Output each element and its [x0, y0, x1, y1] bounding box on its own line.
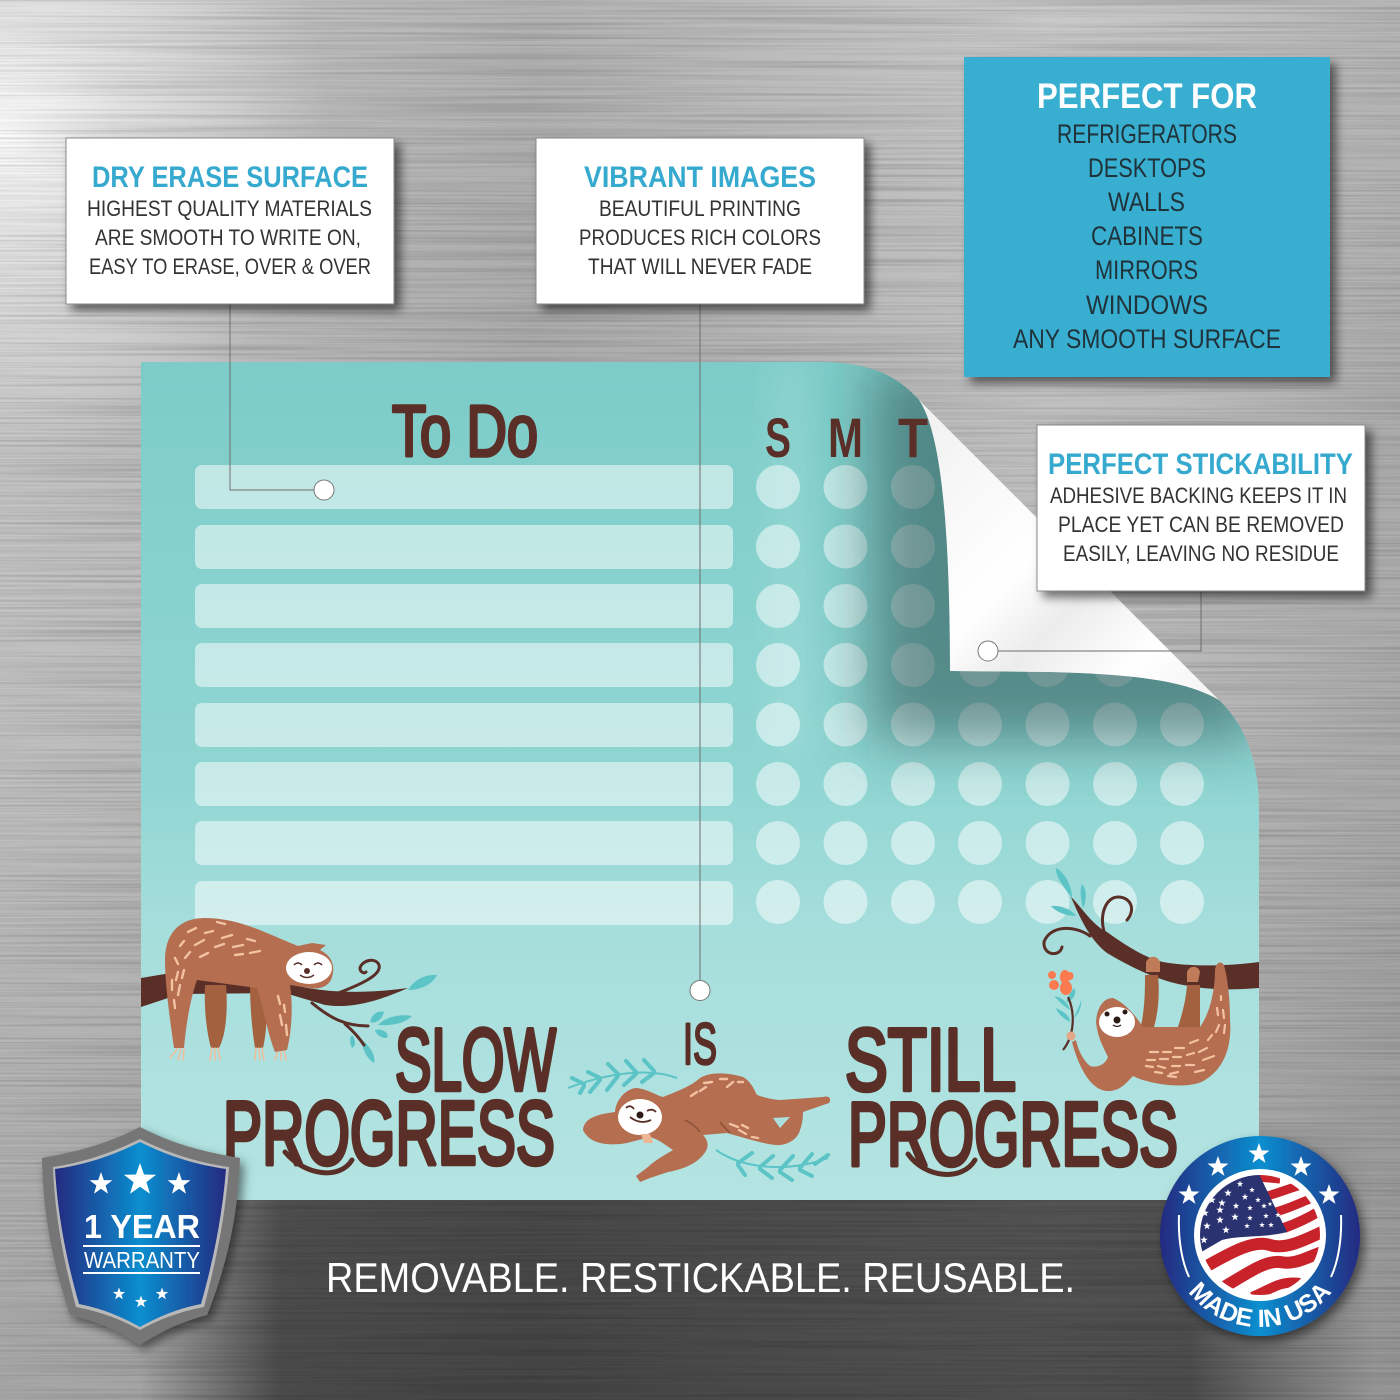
callout: vibrant images: THAT WILL NEVER FADE — [588, 254, 812, 279]
callout: vibrant images: BEAUTIFUL PRINTING — [599, 196, 801, 221]
day letters S M T: M — [828, 406, 863, 469]
callout: vibrant images: PRODUCES RICH COLORS — [579, 225, 821, 250]
callout: dry erase surface: DRY ERASE SURFACE — [92, 161, 368, 194]
panel: perfect for: WALLS — [1108, 187, 1185, 217]
panel: perfect for: ANY SMOOTH SURFACE — [1013, 324, 1281, 354]
badge: 1 year warranty shield: WARRANTY — [84, 1247, 200, 1273]
to-do writing rows — [195, 465, 733, 925]
day letters S M T: S — [765, 406, 791, 469]
slogan: Slow progress is still progress: SLOW — [395, 1010, 556, 1109]
day letters S M T: T — [898, 406, 928, 469]
badge: made in USA: MADE IN USA — [1189, 1281, 1332, 1327]
slogan: Slow progress is still progress: STILL — [845, 1010, 1016, 1109]
callout lines and markers — [230, 304, 1201, 1000]
callout: perfect stickability: PERFECT STICKABILITY — [1048, 448, 1353, 481]
panel: perfect for: CABINETS — [1091, 221, 1203, 251]
sloth hanging on branch, left — [141, 918, 437, 1063]
panel: perfect for: WINDOWS — [1086, 290, 1208, 320]
sloth hanging with flower, right — [1044, 868, 1259, 1091]
tagline: REMOVABLE. RESTICKABLE. REUSABLE. — [326, 1254, 1075, 1301]
panel: perfect for: DESKTOPS — [1088, 153, 1206, 183]
badge: 1 year warranty shield — [42, 1127, 240, 1345]
badge: 1 year warranty shield: 1 YEAR — [84, 1208, 200, 1245]
callout: vibrant images — [536, 138, 864, 304]
sloth lying down with leaves, centre — [568, 1060, 830, 1182]
slogan: Slow progress is still progress: PROGRESS — [223, 1084, 555, 1184]
callout: perfect stickability: PLACE YET CAN BE REMOVED — [1058, 512, 1344, 537]
flag inside badge — [1200, 1175, 1320, 1295]
slogan: Slow progress is still progress: PROGRESS — [848, 1085, 1178, 1185]
callout: dry erase surface: EASY TO ERASE, OVER & OVER — [89, 254, 371, 279]
panel: perfect for — [964, 57, 1330, 377]
slogan: Slow progress is still progress: IS — [683, 1012, 717, 1077]
day tracking circles — [756, 465, 1204, 924]
callout: perfect stickability: ADHESIVE BACKING KEEPS IT IN — [1050, 483, 1347, 508]
panel: perfect for: PERFECT FOR — [1037, 77, 1257, 116]
peeled white corner flap — [919, 400, 1219, 700]
callout: dry erase surface: ARE SMOOTH TO WRITE ON, — [95, 225, 361, 250]
panel: perfect for: REFRIGERATORS — [1057, 119, 1237, 149]
heading: To Do: To Do — [392, 392, 538, 472]
curl shadow on sheet — [770, 362, 1259, 752]
panel: perfect for: MIRRORS — [1095, 255, 1198, 285]
callout: dry erase surface — [66, 138, 394, 304]
badge: made in USA — [1160, 1134, 1370, 1346]
slogan: Slow progress is still progress — [223, 1010, 1178, 1185]
callout: perfect stickability: EASILY, LEAVING NO RESIDUE — [1063, 541, 1339, 566]
magnetic to-do sheet — [141, 362, 1259, 1200]
day letters S M T — [765, 406, 928, 469]
callout: vibrant images: VIBRANT IMAGES — [584, 161, 816, 194]
callout: dry erase surface: HIGHEST QUALITY MATERIALS — [87, 196, 372, 221]
callout: perfect stickability — [1037, 425, 1365, 591]
